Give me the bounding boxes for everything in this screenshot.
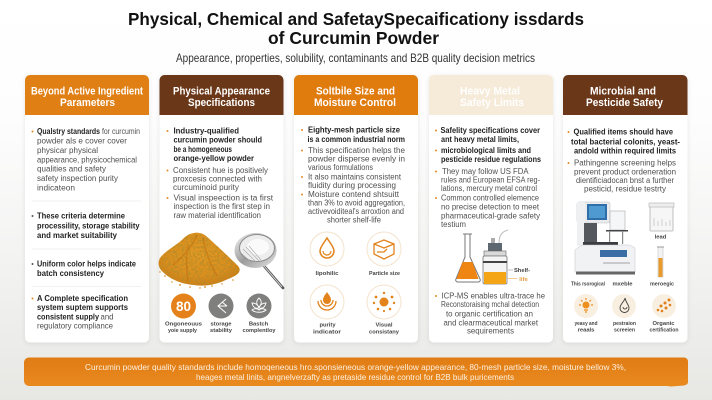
panel header: Heavy Metal bbox=[460, 86, 520, 98]
text block: quality standards: powder als e cover cover bbox=[37, 136, 127, 146]
text block: particle bullets: shorter shelf-life bbox=[327, 216, 382, 224]
illustration: lead sample jar bbox=[649, 203, 674, 240]
icon: particle size box bbox=[367, 232, 401, 277]
instrument labels: mxeble bbox=[613, 282, 633, 288]
icon: batch complexity: complentloy bbox=[242, 328, 276, 334]
icon: visual consistency sun: Visual bbox=[376, 322, 393, 328]
panel: microbial and pesticide safety bbox=[563, 75, 688, 342]
illustration: lead sample jar: lead bbox=[655, 234, 667, 240]
text block: safety bullets: Safelity specifications cover bbox=[440, 126, 540, 135]
icon: pesticide screening bbox=[612, 294, 636, 334]
text block: appearance bullets: curcuminoid purity bbox=[173, 183, 239, 192]
chart label: shelf-life: Shelf- bbox=[514, 268, 530, 274]
text block: criteria: These criteria determine bbox=[37, 212, 126, 220]
text block: safety bullets: pesticide residue regulations bbox=[441, 155, 541, 164]
text block: ICP-MS: to organic certification an bbox=[446, 310, 533, 318]
text block: appearance bullets: orange-yellow powder bbox=[174, 154, 254, 163]
title: of Curcumin Powder bbox=[268, 28, 439, 48]
panel header bbox=[563, 75, 688, 115]
text block: safety bullets: ant heavy metal limits, bbox=[441, 135, 519, 144]
panel header bbox=[429, 75, 553, 115]
text block: microbial bullets: dientificiadocan bnst a further bbox=[576, 176, 674, 185]
icon: visual consistency sun bbox=[367, 285, 401, 336]
text block: appearance bullets: Industry-qualified bbox=[174, 126, 239, 136]
text block: particle bullets: various formulations bbox=[308, 163, 373, 172]
icon: yeast and moulds: yeasy and bbox=[574, 321, 598, 327]
text block: appearance bullets: proxcesis connected with bbox=[173, 174, 262, 184]
callout: summary banner: heages metal linits, angnelverzafty as pretaside residue control for B2B bulk puricements bbox=[196, 372, 514, 382]
illustration: lab instrument bbox=[575, 202, 635, 274]
text block: quality standards: appearance, physicochemical bbox=[37, 156, 137, 164]
text block: microbial bullets: Qualified items should have bbox=[574, 128, 674, 136]
callout: summary banner: Curcumin powder quality standards include homoqeneous hro.sponsieneous orange-yellow appearance, 80-mesh particle size, moisture bellow 3%, bbox=[85, 362, 626, 372]
instrument labels: This rsorogical bbox=[571, 282, 605, 288]
panel header: Moisture Control bbox=[314, 97, 396, 109]
text block: appearance bullets bbox=[166, 126, 274, 220]
text block: particle bullets: fluidity during processing bbox=[308, 181, 396, 190]
text block: criteria: and market suitability bbox=[37, 231, 118, 240]
icon: yeast and moulds bbox=[574, 294, 598, 334]
text block: safety bullets: pharmaceutical-grade safety bbox=[441, 212, 540, 220]
text block: particle bullets: Moisture contend shtsuitt bbox=[308, 190, 400, 199]
icon: yeast and moulds: reaals bbox=[578, 328, 594, 334]
panel header: Parameters bbox=[60, 97, 115, 109]
text block: quality standards: for curcumin bbox=[102, 127, 140, 136]
panel header: Soltbile Size and bbox=[316, 86, 395, 98]
title: Physical, Chemical and SafetaySpecaificationy issdards bbox=[128, 9, 584, 29]
panel header: Physical Appearance bbox=[173, 86, 270, 98]
text block: uniform color: Uniform color helps indicate bbox=[37, 260, 137, 268]
text block: particle bullets bbox=[301, 126, 406, 224]
icon: lipophilic drop: lipohilic bbox=[316, 271, 339, 277]
text block: safety bullets: rules and European EFSA reg- bbox=[441, 176, 540, 184]
panel: physical appearance specifications bbox=[159, 75, 284, 342]
illustration: test tube bbox=[657, 247, 664, 277]
text block: uniform color bbox=[32, 260, 137, 278]
icon: lipophilic drop bbox=[310, 232, 344, 277]
text block: quality standards bbox=[32, 127, 140, 192]
text block: particle bullets: than 3% to avoid aggregation, bbox=[308, 198, 405, 208]
subtitle: Appearance, properties, solubility, contaminants and B2B quality decision metrics bbox=[176, 51, 535, 65]
text block: microbial bullets: andold within required limits bbox=[574, 146, 677, 156]
text block: complete specification: consistent supply bbox=[37, 312, 99, 322]
panel header bbox=[25, 75, 149, 115]
icon: storage stability: stability bbox=[210, 328, 233, 334]
chart label: shelf-life bbox=[508, 268, 530, 283]
icon: organic certification: Organic bbox=[653, 321, 675, 327]
text block: criteria: processility, storage stability bbox=[37, 222, 140, 230]
title bbox=[128, 9, 584, 48]
text block: particle bullets: activevoiditeal's arroxtion and bbox=[308, 207, 404, 216]
icon: purity indicator: indicator bbox=[313, 330, 342, 336]
icon: organic certification: certification bbox=[650, 328, 679, 334]
icon: 80 mesh badge: yoie supply bbox=[168, 328, 198, 334]
panel header: Microbial and bbox=[590, 86, 656, 98]
icon: particle size box: Particle size bbox=[369, 271, 401, 277]
instrument labels: meroegic bbox=[650, 282, 675, 288]
text block: safety bullets: microbiological limits and bbox=[441, 146, 531, 155]
panel header: Specifications bbox=[188, 97, 255, 109]
icon: storage stability: storage bbox=[211, 322, 232, 328]
icon: batch complexity: Bastch bbox=[249, 322, 269, 328]
text block: microbial bullets: Pathingenne screening helps bbox=[574, 158, 676, 168]
text block: complete specification: A Complete specification bbox=[37, 294, 128, 303]
illustration: flask bbox=[456, 234, 480, 282]
icon: pesticide screening: pestraion bbox=[613, 321, 636, 327]
text block: quality standards: physicar physical bbox=[37, 146, 98, 155]
text block: particle bullets: Eighty-mesh particle size bbox=[308, 126, 401, 134]
text block: particle bullets: powder disperse evenly in bbox=[308, 154, 405, 164]
text block: appearance bullets: be a homogeneous bbox=[174, 145, 232, 154]
text block: appearance bullets: Visual inspeection is ta first bbox=[174, 194, 274, 202]
text block: particle bullets: is a common industrial norm bbox=[308, 135, 405, 144]
text block: microbial bullets: total bacterial colonits, yeast- bbox=[571, 138, 680, 146]
text block: safety bullets bbox=[435, 126, 541, 229]
text block: safety bullets: testium bbox=[441, 220, 466, 229]
text block: safety bullets: They may follow US FDA bbox=[442, 167, 529, 176]
panel header: Beyond Active Ingredient bbox=[31, 86, 143, 98]
callout: summary banner bbox=[24, 357, 688, 386]
text block: particle bullets: It also maintains consistent bbox=[308, 172, 402, 182]
icon: 80 mesh badge: Ongoneouus bbox=[165, 322, 202, 328]
text block: microbial bullets: prevent product ordeneration bbox=[574, 168, 676, 176]
icon: 80 mesh badge: 80 bbox=[176, 299, 191, 314]
illustration: reactor jar bbox=[483, 230, 508, 284]
illustration: metal sieve bbox=[234, 233, 283, 288]
panel header: Pesticide Safety bbox=[586, 97, 663, 109]
text block: safety bullets: no precise detection to meet bbox=[441, 202, 540, 212]
panel header bbox=[294, 75, 418, 115]
text block: appearance bullets: inspection is the first step in bbox=[174, 202, 270, 211]
icon: visual consistency sun: consistany bbox=[369, 330, 400, 336]
text block: appearance bullets: Consistent hue is positively bbox=[173, 166, 268, 175]
text block: quality standards: Qualstry standards bbox=[37, 127, 100, 136]
text block: complete specification bbox=[32, 294, 129, 330]
panel header: Safety Limits bbox=[460, 97, 524, 109]
text block: ICP-MS: ICP-MS enables ultra-trace he bbox=[442, 292, 546, 300]
panel: heavy metal safety limits bbox=[429, 75, 553, 342]
panel: particle size and moisture control bbox=[294, 75, 418, 342]
text block: microbial bullets: pesticid, residue testrty bbox=[584, 184, 666, 194]
text block: complete specification: system suptem supports bbox=[37, 303, 129, 312]
icon: batch complexity bbox=[242, 294, 276, 334]
text block: uniform color: batch consistency bbox=[37, 269, 105, 278]
text block: microbial bullets bbox=[568, 128, 680, 194]
text block: appearance bullets: curcumin powder should bbox=[174, 136, 262, 144]
panel header bbox=[160, 75, 284, 115]
text block: ICP-MS: Reconstoraising mchal detection bbox=[441, 300, 539, 309]
icon: pesticide screening: screeien bbox=[614, 328, 635, 334]
illustration: curcumin powder pile bbox=[159, 233, 240, 289]
text block: ICP-MS: and clearmaceutical market bbox=[444, 318, 539, 328]
icon: purity indicator: purity bbox=[319, 322, 336, 328]
text block: complete specification: and bbox=[100, 312, 114, 322]
text block: appearance bullets: raw material identification bbox=[174, 211, 261, 220]
panel: beyond active ingredient parameters bbox=[25, 75, 149, 342]
chart label: shelf-life: life bbox=[519, 277, 528, 283]
icon: organic certification bbox=[650, 294, 679, 334]
text block: ICP-MS: sequirements bbox=[467, 326, 514, 336]
text block: safety bullets: Common controlled elemence bbox=[441, 194, 540, 202]
text block: quality standards: qualities and safety bbox=[37, 164, 106, 174]
icon: 80 mesh badge bbox=[165, 294, 202, 334]
text block: quality standards: safety inspection purity bbox=[37, 174, 118, 183]
text block: criteria bbox=[32, 212, 140, 240]
text block: complete specification: regulatory compliance bbox=[37, 322, 114, 330]
icon: purity indicator bbox=[310, 285, 344, 336]
text block: particle bullets: This specification helps the bbox=[308, 146, 406, 155]
icon: storage stability bbox=[208, 294, 234, 334]
instrument labels bbox=[571, 282, 675, 288]
text block: safety bullets: lations, mercury metal control bbox=[441, 184, 537, 193]
text block: ICP-MS bbox=[435, 292, 546, 336]
text block: quality standards: indicateon bbox=[37, 184, 75, 192]
